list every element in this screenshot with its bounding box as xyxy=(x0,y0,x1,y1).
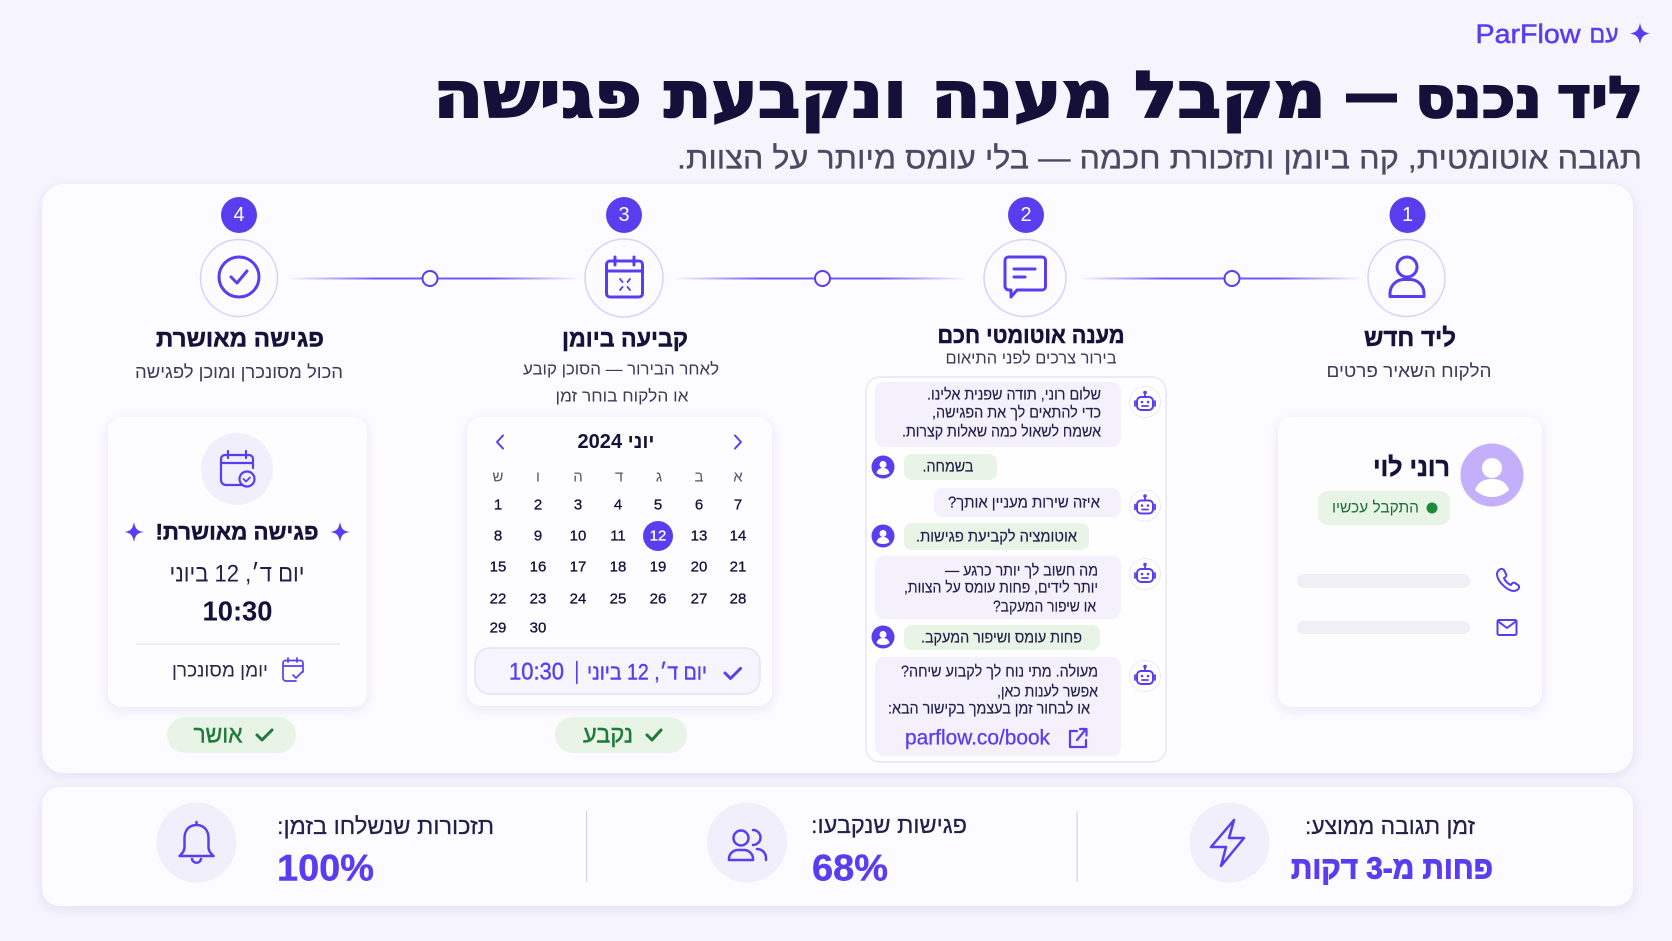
calendar days: 4 xyxy=(614,496,622,514)
meeting time: 10:30 xyxy=(202,596,272,626)
icon: bot 2 xyxy=(1130,490,1160,521)
confirmation heading with stars: פגישה מאושרת! xyxy=(156,520,318,544)
calendar days: 27 xyxy=(691,590,707,608)
subtitle: תגובה אוטומטית, קה ביומן ותזכורת חכמה — בלי עומס מיותר על הצוות. xyxy=(677,140,1642,176)
step description: בירור צרכים לפני התיאום xyxy=(946,348,1116,368)
step heading: פגישה מאושרת xyxy=(156,326,324,352)
calendar days: 6 xyxy=(695,496,703,514)
calendar days: 20 xyxy=(691,558,707,576)
stat: meetings booked xyxy=(707,802,967,888)
stat: reminders sent xyxy=(156,802,494,888)
user reply 2 xyxy=(904,523,1089,550)
card: meeting confirmation xyxy=(108,417,367,707)
lead name: רוני לוי xyxy=(1373,452,1450,482)
bot message 4 with booking link xyxy=(875,657,1121,756)
icon: bell xyxy=(156,802,236,882)
connector: step 4 to step 3 xyxy=(288,271,580,286)
title xyxy=(433,59,1643,133)
title: מענה xyxy=(931,59,1114,133)
calendar days: 7 xyxy=(734,496,742,514)
calendar days: 29 xyxy=(490,620,506,636)
status pill: booked xyxy=(555,717,687,753)
calendar days: 1 xyxy=(494,496,502,514)
calendar days: 21 xyxy=(730,558,746,576)
icon: check circle xyxy=(200,240,278,316)
icon: bot 3 xyxy=(1130,558,1160,590)
step number 4: 4 xyxy=(233,204,245,226)
calendar days: 19 xyxy=(650,558,666,576)
calendar days: 10 xyxy=(570,528,586,544)
status pill: confirmed xyxy=(167,717,296,753)
step description xyxy=(523,360,719,406)
bot message 4 with booking link: או לבחור זמן בעצמך בקישור הבא: xyxy=(888,700,1090,718)
weekday labels: ה xyxy=(573,468,583,486)
calendar days xyxy=(490,496,746,636)
icon: calendar xyxy=(585,239,663,317)
bot message 3 xyxy=(875,556,1121,619)
panel: process flow xyxy=(42,184,1633,773)
step heading: ליד חדש xyxy=(1364,324,1456,352)
calendar days: 24 xyxy=(570,590,586,608)
step description: לאחר הבירור — הסוכן קובע xyxy=(523,360,719,378)
calendar days: 23 xyxy=(530,590,546,608)
calendar days: 8 xyxy=(494,528,502,544)
step 3: calendar booking xyxy=(467,197,772,753)
card: lead details xyxy=(1278,417,1542,707)
icon: calendar confirmed xyxy=(201,433,273,505)
step number 4 xyxy=(221,197,257,233)
icon: users xyxy=(707,802,787,882)
step number 3 xyxy=(606,197,642,233)
brand tag: ParFlow: עם xyxy=(1590,22,1618,48)
stat value: 100% xyxy=(277,848,374,888)
user reply 3: פחות עומס ושיפור המעקב. xyxy=(921,630,1082,646)
bot message 1: שלום רוני, תודה שפנית אלינו. xyxy=(927,386,1101,404)
stat label: פגישות שנקבעו: xyxy=(811,812,967,838)
bot message 3: יותר לידים, פחות עומס על הצוות, xyxy=(904,580,1098,596)
bot message 4 with booking link: מעולה. מתי נוח לך לקבוע שיחה? xyxy=(901,664,1098,680)
weekday labels: ש xyxy=(493,468,504,486)
email row xyxy=(1297,620,1516,635)
calendar days: 13 xyxy=(691,528,707,544)
bot message 4 with booking link: אפשר לענות כאן, xyxy=(997,684,1098,700)
user reply 1 xyxy=(904,454,997,480)
bot message 2 xyxy=(934,488,1121,517)
step number 2 xyxy=(1008,197,1044,233)
calendar days: 25 xyxy=(610,590,626,608)
card: chat conversation xyxy=(866,377,1166,762)
step 1: new lead xyxy=(1278,197,1542,707)
step number 3: 3 xyxy=(618,204,630,226)
stat label: תזכורות שנשלחו בזמן: xyxy=(277,813,494,839)
weekday labels: ו xyxy=(536,468,540,486)
step number 2: 2 xyxy=(1020,204,1032,226)
stat value: פחות מ-3 דקות xyxy=(1291,850,1493,886)
user reply 3 xyxy=(904,625,1100,650)
selected day 12 xyxy=(643,521,673,551)
calendar sync note: יומן מסונכרן xyxy=(172,660,268,682)
icon: chat bubble xyxy=(984,240,1066,316)
panel: statistics xyxy=(42,787,1633,906)
title: נכנס xyxy=(1415,65,1542,131)
icon: lightning bolt xyxy=(1190,802,1270,882)
title: ליד xyxy=(1557,65,1643,131)
calendar days: 14 xyxy=(730,528,746,544)
phone row xyxy=(1297,569,1519,591)
brand tag: ParFlow xyxy=(1476,19,1650,49)
status pill xyxy=(1318,491,1450,525)
status pill: confirmed: אושר xyxy=(194,722,242,748)
selected slot bar: 10:30 xyxy=(509,658,564,686)
calendar days: 3 xyxy=(574,496,582,514)
calendar days: 18 xyxy=(610,558,626,576)
calendar days: 22 xyxy=(490,590,506,608)
booking link: parflow.co/book xyxy=(905,726,1050,750)
step 4: confirmed meeting xyxy=(108,197,367,753)
step description: הלקוח השאיר פרטים xyxy=(1326,361,1492,381)
step 2: smart auto-reply xyxy=(866,197,1166,762)
connector: step 3 to step 2 xyxy=(674,271,966,286)
bot message 3: מה חשוב לך יותר כרגע — xyxy=(945,562,1098,580)
icon: user 2 xyxy=(872,524,894,548)
weekday labels: ד xyxy=(615,468,623,486)
calendar days: 16 xyxy=(530,558,546,576)
selected slot bar: יום ד׳, 12 ביוני xyxy=(587,660,707,684)
weekday labels: ג xyxy=(656,468,662,486)
calendar days: 9 xyxy=(534,528,542,544)
calendar days: 28 xyxy=(730,590,746,608)
user reply 2: אוטומציה לקביעת פגישות. xyxy=(916,528,1077,546)
weekday labels xyxy=(493,468,743,486)
status pill: booked: נקבע xyxy=(583,722,633,748)
bot message 2: איזה שירות מעניין אותך? xyxy=(948,494,1100,512)
meeting date: יום ד׳, 12 ביוני xyxy=(169,560,304,588)
calendar days: 17 xyxy=(570,558,586,576)
stat value: 68% xyxy=(812,848,888,888)
icon: person xyxy=(1368,240,1445,316)
icon: user 3 xyxy=(872,626,894,648)
icon: external link xyxy=(1070,729,1086,747)
selected day 12: 12 xyxy=(650,528,666,544)
calendar header: יוני 2024 xyxy=(578,431,654,453)
calendar sync note xyxy=(172,658,303,682)
icon: user 1 xyxy=(872,456,894,478)
bot message 1: אשמח לשאול כמה שאלות קצרות. xyxy=(902,424,1101,440)
card: calendar xyxy=(467,417,772,706)
icon: bot 4 xyxy=(1130,660,1160,692)
step number 1: 1 xyxy=(1402,204,1413,226)
title: מקבל xyxy=(1134,59,1326,133)
step heading: קביעה ביומן xyxy=(562,326,688,352)
bot message 3: או שיפור המעקב? xyxy=(993,598,1096,616)
calendar header xyxy=(497,431,741,453)
calendar days: 2 xyxy=(534,496,542,514)
weekday labels: ב xyxy=(695,468,704,486)
title: ונקבעת xyxy=(664,59,907,133)
lead avatar xyxy=(1460,444,1524,506)
calendar days: 15 xyxy=(490,558,506,576)
title: פגישה xyxy=(433,59,642,133)
calendar days: 11 xyxy=(610,528,626,544)
stat: response time xyxy=(1190,802,1493,886)
icon: bot 1 xyxy=(1130,386,1160,418)
calendar days: 26 xyxy=(650,590,666,608)
step number 1 xyxy=(1390,197,1426,233)
brand tag: ParFlow: ParFlow xyxy=(1476,19,1581,49)
user reply 1: בשמחה. xyxy=(922,458,974,476)
connector: step 2 to step 1 xyxy=(1080,271,1362,286)
status pill: התקבל עכשיו xyxy=(1332,498,1419,516)
step description: או הלקוח בוחר זמן xyxy=(556,386,689,406)
step heading: מענה אוטומטי חכם xyxy=(938,322,1124,348)
bot message 1: כדי להתאים לך את הפגישה, xyxy=(932,404,1101,422)
weekday labels: א xyxy=(733,468,743,486)
stat label: זמן תגובה ממוצע: xyxy=(1305,813,1476,839)
selected slot bar xyxy=(475,648,760,694)
calendar days: 5 xyxy=(654,496,662,514)
bot message 1 xyxy=(875,382,1121,447)
step description: הכול מסונכרן ומוכן לפגישה xyxy=(135,362,343,382)
calendar days: 30 xyxy=(530,620,546,636)
